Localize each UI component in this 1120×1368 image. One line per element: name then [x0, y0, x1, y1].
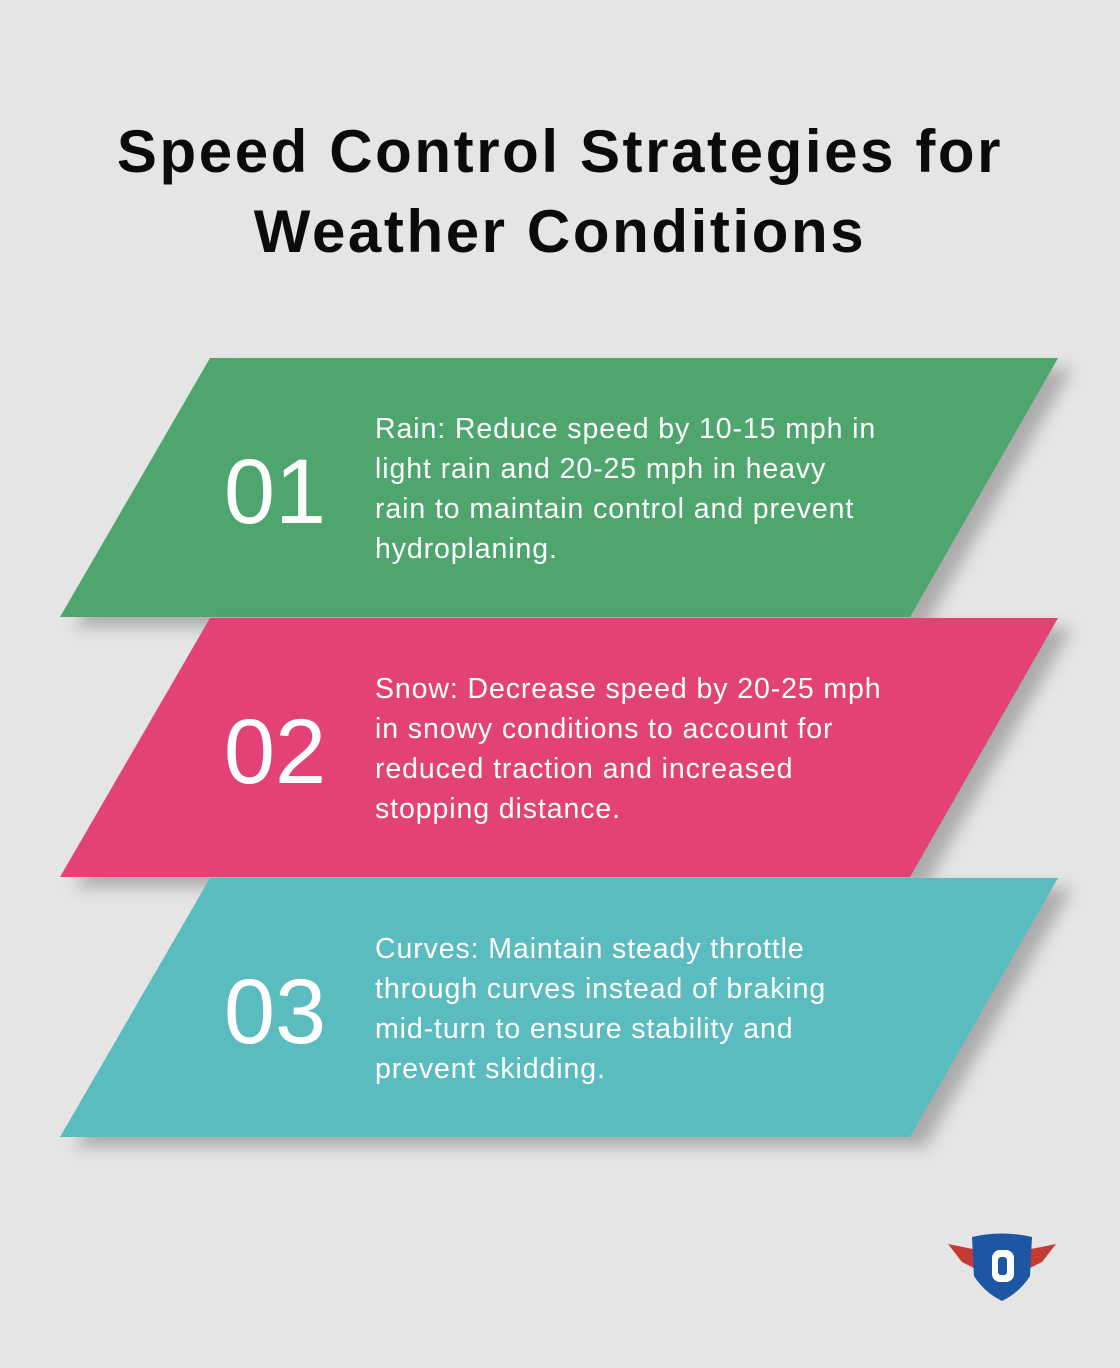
panel 3 number: 03 [224, 961, 326, 1063]
panel 2 text: reduced traction and increased [375, 753, 793, 785]
panel 1 text: rain to maintain control and prevent [375, 493, 854, 525]
panel 3 text: prevent skidding. [375, 1053, 606, 1085]
logo [948, 1234, 1056, 1301]
panel 1 text: light rain and 20-25 mph in heavy [375, 453, 826, 485]
panel 2 text: stopping distance. [375, 793, 621, 825]
panel 2 text [375, 673, 882, 825]
panel 2 text: in snowy conditions to account for [375, 713, 833, 745]
panel 1 text: hydroplaning. [375, 533, 558, 565]
panel 3 text: Curves: Maintain steady throttle [375, 933, 805, 965]
panel 2 shape [60, 618, 1072, 887]
panel 1 text: Rain: Reduce speed by 10-15 mph in [375, 413, 876, 445]
panel 2 number: 02 [224, 701, 326, 803]
panel 1 text [375, 413, 876, 565]
title: Speed Control Strategies for [117, 118, 1003, 185]
panel 1 shape [60, 358, 1072, 627]
panel 2 text: Snow: Decrease speed by 20-25 mph [375, 673, 882, 705]
title: Weather Conditions [254, 198, 866, 265]
panel 3 text: through curves instead of braking [375, 973, 826, 1005]
panel 3 text [375, 933, 826, 1085]
panel 1 number: 01 [224, 441, 326, 543]
panel 3 text: mid-turn to ensure stability and [375, 1013, 794, 1045]
title [117, 118, 1003, 265]
panel 3 shape [60, 878, 1072, 1147]
